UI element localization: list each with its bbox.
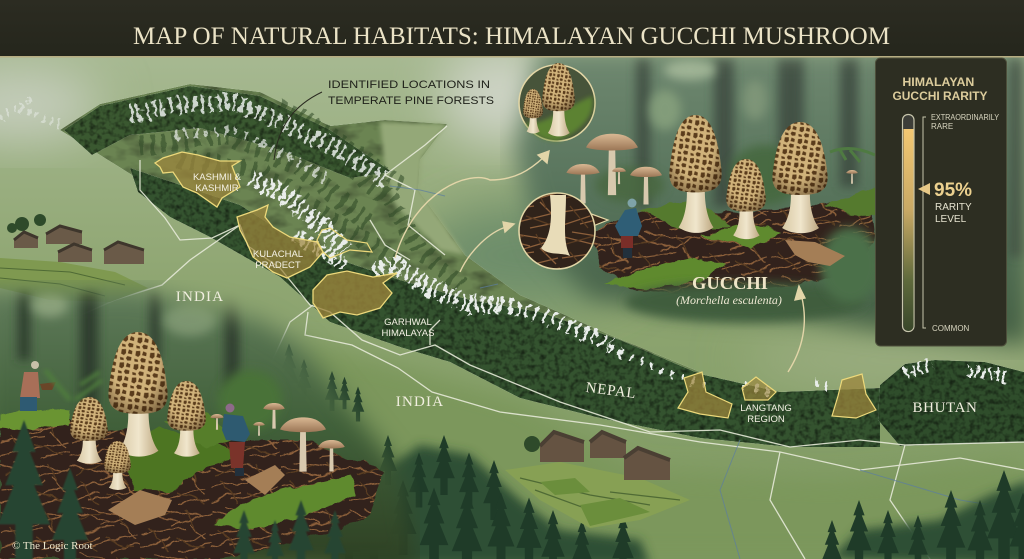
snow peaks: [0, 100, 1008, 391]
title text: MAP OF NATURAL HABITATS: HIMALAYAN GUCCHI MUSHROOM: [133, 23, 890, 50]
scale label: common: COMMON: [932, 324, 970, 333]
forest floor litter: top right: [590, 188, 880, 322]
callout: identified locations: [274, 79, 494, 160]
species label: GUCCHI: [692, 273, 768, 293]
ridge lines: [140, 105, 460, 285]
dark tree mass lower centre: [330, 445, 650, 559]
arrow: map to stem inset: [460, 222, 514, 272]
morels: bottom left: [70, 332, 206, 490]
country: Nepal: NEPAL: [585, 380, 637, 402]
inset circle: morel close-up: [519, 63, 595, 141]
country: India north: INDIA: [176, 289, 224, 305]
north hills and plateau: [60, 84, 700, 415]
scale label: extraordinarily rare: EXTRAORDINARILY: [931, 113, 1000, 122]
region: Garhwal: [313, 271, 397, 318]
pale mushrooms: top right: [566, 134, 858, 205]
farm village: left: [0, 214, 148, 302]
country: India south: INDIA: [396, 394, 444, 410]
pale mushrooms: bottom left: [210, 403, 345, 472]
pointer: [918, 183, 930, 195]
label: Kashmir: KASHMII &: [193, 172, 242, 183]
panel heading: GUCCHI RARITY: [892, 89, 988, 103]
region: Langtang left: [678, 372, 732, 418]
region: Kashmir: [155, 152, 240, 207]
oak leaves: bottom left: [108, 465, 285, 525]
fern: top right: [830, 148, 875, 162]
species label: [676, 273, 782, 307]
callout: identified locations: TEMPERATE PINE FORESTS: [328, 95, 494, 107]
rarity value: 95%: [934, 180, 972, 201]
mountain range dark forest band: [64, 86, 1024, 447]
region: Kulachal: [237, 205, 323, 278]
label: Kulachal: PRADECT: [255, 260, 301, 271]
map labels: [193, 172, 792, 425]
panel: rarity meter: [876, 58, 1006, 346]
label: Garhwal: GARHWAL: [384, 317, 432, 328]
map foreground trees: [279, 344, 1024, 559]
title bar: [0, 0, 1024, 58]
forager with basket: far left: [20, 361, 56, 411]
label: Kulachal: KULACHAL: [253, 249, 303, 260]
forest floor litter: bottom left: [0, 408, 385, 559]
region: Langtang middle: [742, 377, 776, 400]
region: Kulachal extension: [317, 228, 372, 258]
scale bracket: [923, 117, 926, 328]
small forager: top right: [615, 198, 642, 258]
highlighted habitat regions: [155, 152, 876, 418]
arrow: map to morel inset: [395, 151, 549, 258]
label: Langtang: REGION: [747, 414, 785, 425]
fern: far left: [45, 370, 102, 400]
forest scene: bottom left: [0, 280, 420, 559]
morels: top right: [669, 115, 828, 239]
rarity bar: [902, 114, 914, 332]
panel heading: HIMALAYAN: [902, 75, 974, 89]
foreground trees: bottom left: [0, 420, 346, 559]
forager: bottom left: [222, 404, 250, 476]
dark tree mass lower right: [830, 480, 1024, 559]
label: Langtang: LANGTANG: [740, 403, 792, 414]
farm village: lower: [505, 432, 690, 528]
species label: (Morchella esculenta): [676, 293, 782, 307]
rarity caption: LEVEL: [935, 214, 967, 225]
copyright: © The Logic Root: [12, 540, 93, 552]
border lines: [70, 126, 1024, 559]
forest scene: top right: [500, 50, 1024, 360]
region: Langtang right: [832, 374, 876, 418]
callout: identified locations: IDENTIFIED LOCATIONS IN: [328, 79, 490, 91]
arrow: Langtang to Gucchi: [788, 286, 805, 372]
blue rivers: [390, 186, 1020, 559]
country labels: [176, 289, 977, 416]
label: Kashmir: KASHMIR: [195, 183, 239, 194]
label: Garhwal: HIMALAYAS: [382, 328, 434, 339]
inset circle: stem close-up: [519, 193, 608, 269]
country: Bhutan: BHUTAN: [913, 400, 977, 416]
scale label: extraordinarily rare: RARE: [931, 122, 953, 131]
rarity caption: RARITY: [935, 202, 972, 213]
oak leaf: top right: [785, 240, 845, 266]
blurred trunks: [636, 57, 1024, 257]
